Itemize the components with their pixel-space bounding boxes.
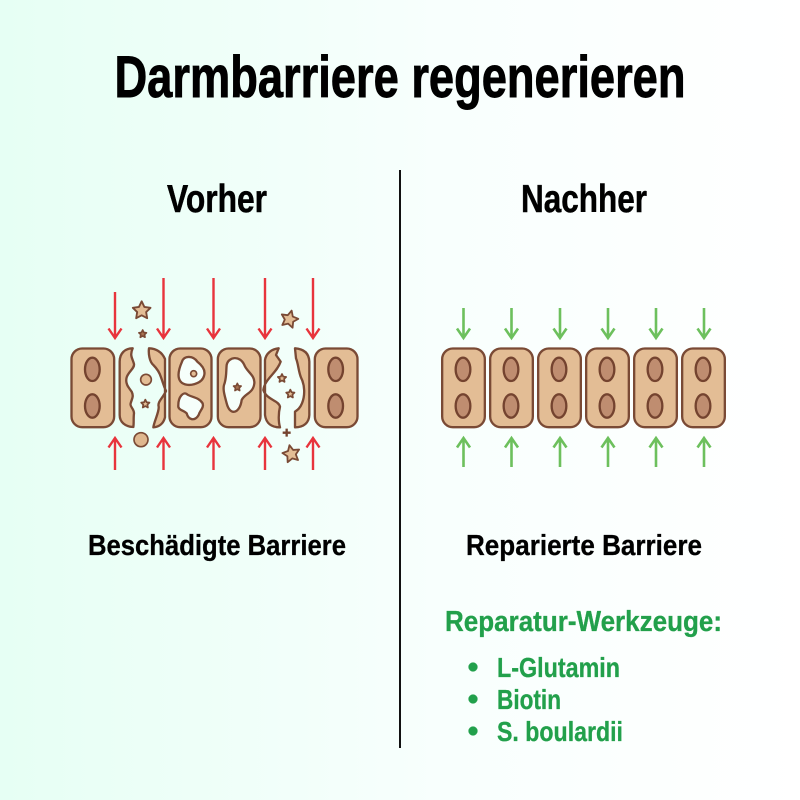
red arrows from above [108, 278, 320, 338]
intact cell 1 [71, 348, 114, 427]
panel: Vorher [71, 178, 357, 562]
intact cell 6 [315, 348, 357, 427]
panel: Nachher [442, 178, 725, 747]
heading: Vorher: Vorher [167, 178, 267, 221]
debris particles [133, 301, 151, 447]
cell 3 with holes [169, 348, 211, 427]
repair tools heading: Reparatur-Werkzeuge: [445, 606, 722, 638]
torn cell 5 [263, 348, 309, 427]
caption: damaged barrier: Beschädigte Barriere [88, 530, 346, 562]
repair tools list [468, 652, 623, 747]
damaged cell row, right part [218, 308, 357, 463]
repair tools list: S. boulardii [497, 716, 623, 747]
intact cell row [442, 348, 725, 427]
cell 4 with hole [218, 348, 260, 427]
repair tools list: Biotin [497, 684, 561, 715]
debris particles [278, 308, 301, 463]
green arrows from below [457, 438, 710, 467]
divider line [399, 170, 401, 748]
damaged cell row [71, 301, 211, 447]
red arrows from below [108, 438, 320, 470]
repair tools list: L-Glutamin [497, 652, 620, 683]
green arrows from above [457, 308, 710, 338]
torn cell 2 [120, 348, 166, 427]
heading: Nachher: Nachher [521, 178, 647, 221]
caption: repaired barrier: Reparierte Barriere [466, 530, 702, 562]
